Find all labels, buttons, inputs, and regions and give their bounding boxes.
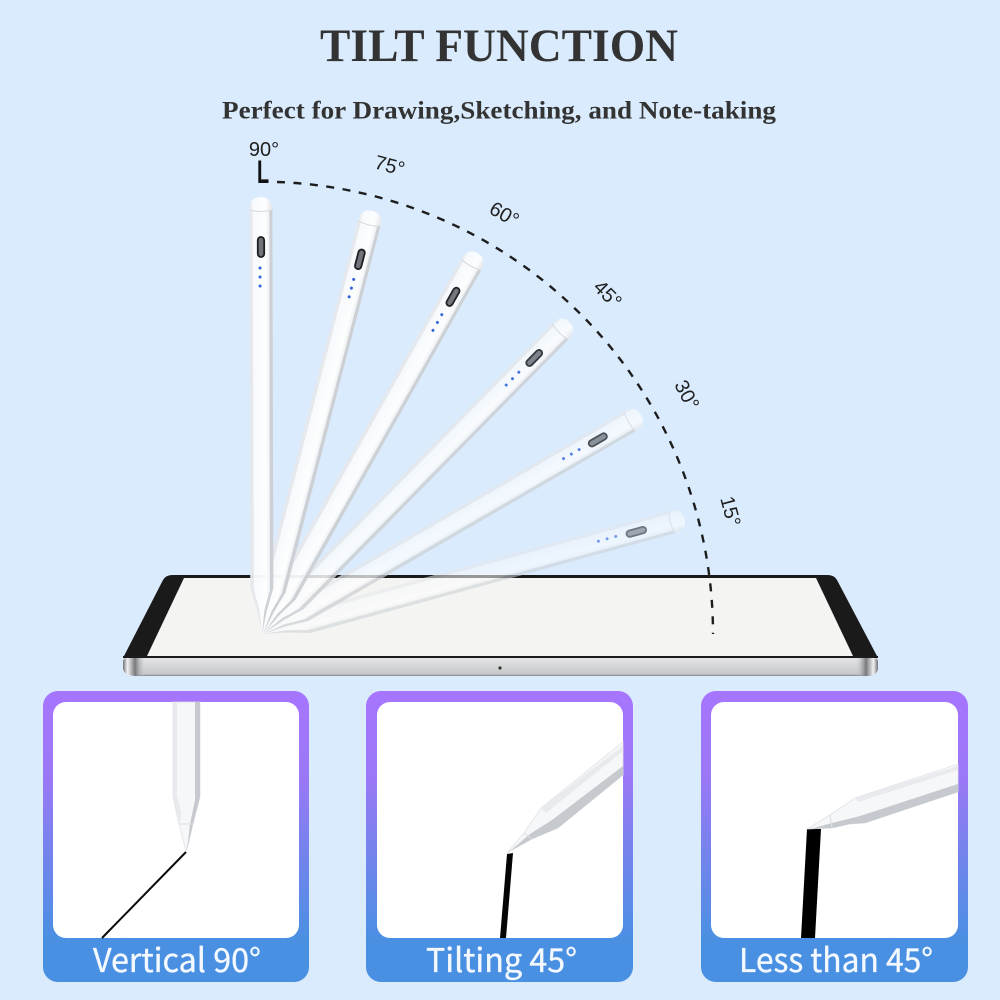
pen at 45 degrees xyxy=(255,314,577,642)
pen tip tilted 45 xyxy=(507,742,623,853)
label: Tilting 45° xyxy=(426,934,577,982)
pen at 15 degrees xyxy=(260,508,688,645)
pen tip vertical xyxy=(173,702,200,851)
pen at 60 degrees xyxy=(253,248,488,640)
right-angle mark: L xyxy=(257,154,269,190)
drawn thick line xyxy=(801,829,821,938)
drawn thin line xyxy=(102,852,186,938)
label 45 degrees: 45° xyxy=(589,276,626,313)
pen fan xyxy=(249,197,688,645)
panel: vertical 90 xyxy=(43,691,309,982)
tablet xyxy=(123,575,878,676)
label 30 degrees: 30° xyxy=(669,377,703,414)
label 60 degrees: 60° xyxy=(485,198,523,232)
label: Vertical 90° xyxy=(93,934,261,982)
pen at 75 degrees xyxy=(252,208,384,637)
label 15 degrees: 15° xyxy=(715,494,744,529)
pen at 90 degrees xyxy=(249,197,273,634)
drawn medium line xyxy=(500,853,513,938)
pen tip tilted low xyxy=(807,764,958,829)
panel: less than 45 xyxy=(701,691,968,982)
angle labels xyxy=(249,139,744,529)
title: TILT FUNCTION xyxy=(320,20,678,72)
subtitle: Perfect for Drawing,Sketching, and Note-taking xyxy=(222,98,777,124)
dashed angle arc xyxy=(277,182,713,634)
panel: tilting 45 xyxy=(366,691,633,982)
pen at 30 degrees xyxy=(257,405,647,644)
label: Less than 45° xyxy=(739,934,933,982)
label 75 degrees: 75° xyxy=(372,152,407,181)
label 90 degrees: 90° xyxy=(249,139,279,161)
